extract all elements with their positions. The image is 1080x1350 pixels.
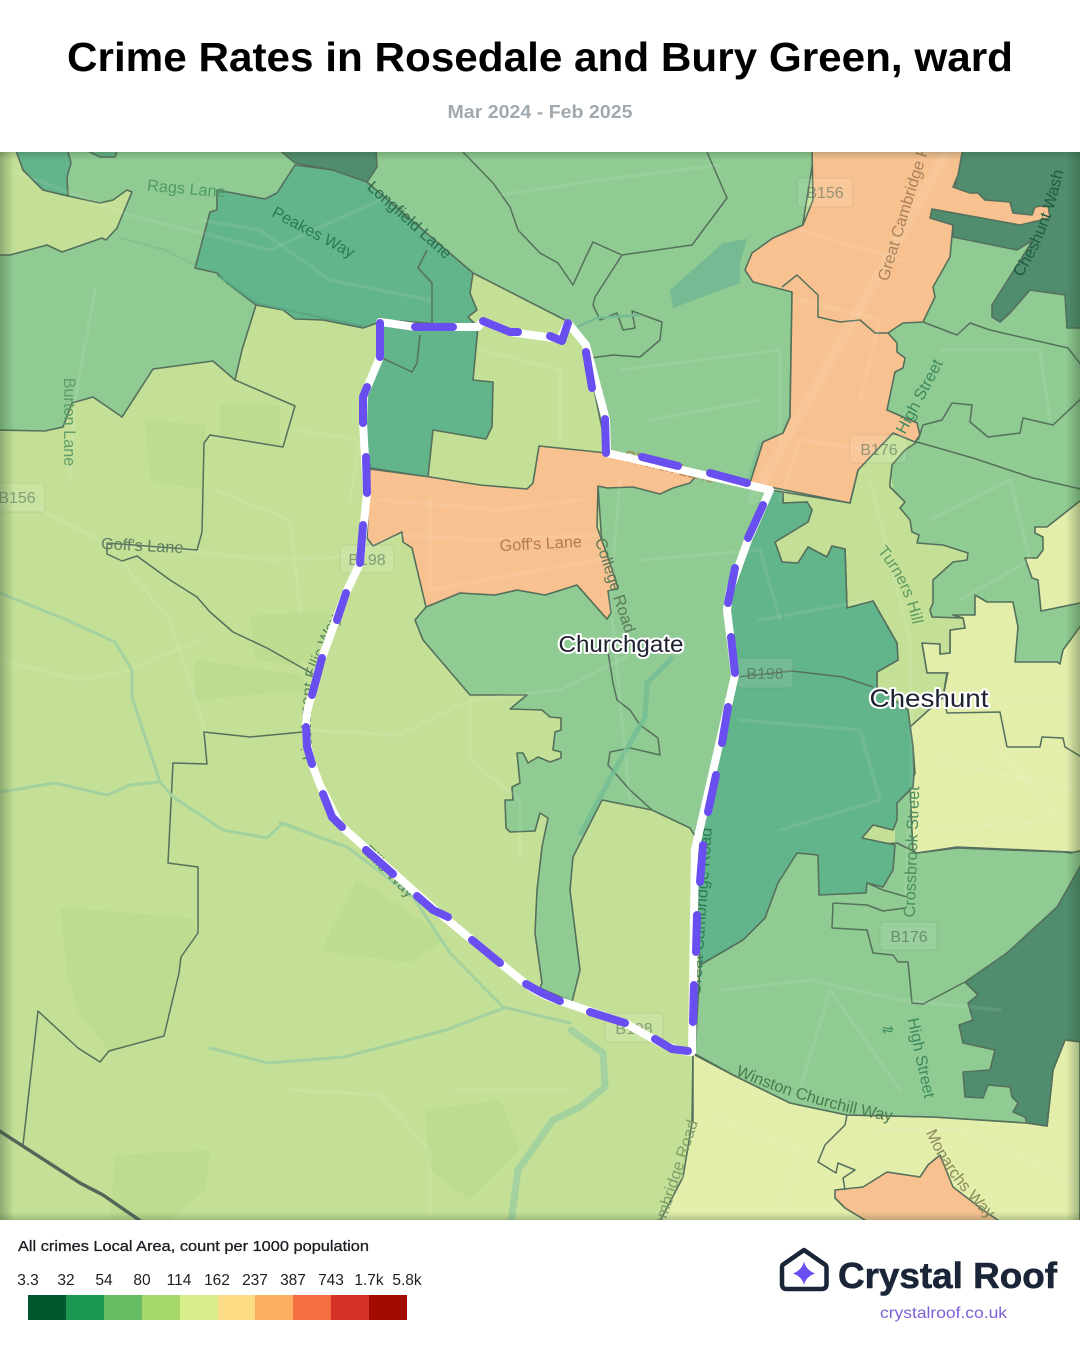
legend scale values: 54 [95, 1272, 113, 1289]
label Turners Hill: Turners Hill [880, 544, 924, 624]
darkest green region top [280, 152, 378, 183]
darker green Peakes Way region [195, 165, 478, 328]
shield B176 south [880, 922, 937, 950]
pond [670, 239, 747, 308]
subtitle: date range: Mar 2024 - Feb 2025 [448, 102, 632, 122]
road number shields [0, 178, 937, 1042]
legend scale values: 743 [318, 1272, 344, 1289]
darkest green region south-east [959, 858, 1080, 1126]
shield B156 north: B156 [806, 185, 844, 202]
ward boundary: Rosedale and Bury Green [306, 321, 770, 1052]
pale yellow region east [908, 595, 1080, 855]
label Lieutenant Ellis Way: Lieutenant Ellis Way [300, 614, 341, 760]
legend scale values: 80 [133, 1272, 151, 1289]
label Great Cambridge Road north: Great Cambridge Road [875, 117, 941, 283]
shield B156 west [0, 483, 45, 512]
water courses [0, 238, 760, 1222]
mid green region south-east [695, 843, 1080, 1126]
light green Turners Hill region [775, 433, 968, 727]
shield B198 south: B198 [615, 1021, 653, 1038]
map edge vignette [0, 152, 1080, 1220]
icon: purple star [793, 1262, 815, 1285]
label Goff's Lane west: Goff's Lane [101, 535, 184, 557]
shield B176 south: B176 [890, 929, 928, 946]
legend scale values [17, 1272, 422, 1289]
legend [17, 1239, 422, 1320]
legend scale values: 32 [57, 1272, 75, 1289]
shield B198 west: B198 [348, 552, 386, 569]
legend scale values: 387 [280, 1272, 306, 1289]
pale yellow wedge east [1025, 497, 1080, 611]
label High Street south: High Street [904, 1016, 938, 1100]
legend scale values: 3.3 [17, 1272, 39, 1289]
title: Crime Rates in Rosedale and Bury Green, ward [67, 34, 1013, 80]
label High Street north: High Street [893, 356, 947, 437]
legend title: All crimes Local Area, count per 1000 population [18, 1239, 369, 1255]
internal area boundary lines [23, 152, 1080, 1190]
label Great Cambridge Road south: Great Cambridge Road [686, 827, 716, 996]
pale yellow region south-east, below Winston Churchill Way [658, 1040, 1080, 1225]
orange region south-east [835, 1155, 1005, 1225]
mid green Churchgate region [415, 453, 770, 1002]
darker green region inside ward [363, 322, 493, 477]
darkest green region north-east [930, 148, 1080, 328]
shield B198 south [605, 1013, 663, 1042]
station symbol: ⇌ [881, 1020, 895, 1038]
shield B176 north: B176 [860, 442, 898, 459]
shield B198 east [737, 658, 793, 688]
orange region north-east, Great Cambridge Road [745, 148, 1050, 503]
label Winston Churchill Way: Winston Churchill Way [738, 1064, 893, 1124]
label Goff's Lane: Goff's Lane [499, 533, 582, 555]
legend scale values: 114 [167, 1272, 192, 1289]
wordmark: Crystal Roof [838, 1255, 1058, 1296]
darker green sliver top [88, 152, 118, 158]
park patches [60, 405, 520, 1220]
legend colour bar [28, 1295, 407, 1320]
minor roads [0, 155, 1075, 1220]
legend scale values: 237 [242, 1272, 268, 1289]
logo: Crystal Roof [782, 1250, 1058, 1322]
ward boundary purple dashes [306, 321, 763, 1051]
place label Cheshunt: Cheshunt [870, 685, 989, 713]
place label Churchgate: Churchgate [558, 631, 684, 657]
orange region Goff's Lane [367, 446, 695, 619]
legend scale values: 1.7k [354, 1272, 384, 1289]
label College Road: College Road [591, 536, 639, 635]
shield B198 west [340, 545, 394, 573]
shield B156 north [797, 178, 853, 207]
label Rags Lane: Rags Lane [146, 177, 226, 201]
shield B198 east: B198 [746, 666, 784, 683]
label Cambridge Road: Great Cambridge Road [633, 1118, 702, 1283]
label Monarchs Way: Monarchs Way [926, 1128, 995, 1218]
icon: house outline [782, 1250, 826, 1289]
map base: lowest-band light green land [0, 152, 955, 1220]
ward boundary white casing [306, 321, 770, 1052]
label Church Lane: Church Lane [622, 447, 717, 487]
label Ellis Way: Ellis Way [359, 842, 419, 902]
legend scale values: 5.8k [392, 1272, 422, 1289]
shield B176 north [850, 435, 907, 463]
label Cheshunt Wash: Cheshunt Wash [1014, 170, 1064, 276]
darker green Cheshunt region [695, 490, 914, 965]
legend scale values: 162 [204, 1272, 230, 1289]
darker green region top-left [15, 148, 71, 196]
label Burton Lane: Burton Lane [60, 378, 78, 466]
mid green north region [0, 148, 815, 490]
label Peakes Way: Peakes Way [269, 203, 358, 262]
label Longfield Lane: Longfield Lane [364, 178, 455, 263]
rail line [0, 1130, 142, 1222]
mid green east region [888, 238, 1080, 849]
label Crossbrook Street: Crossbrook Street [901, 785, 923, 918]
website address: crystalroof.co.uk [880, 1305, 1008, 1322]
